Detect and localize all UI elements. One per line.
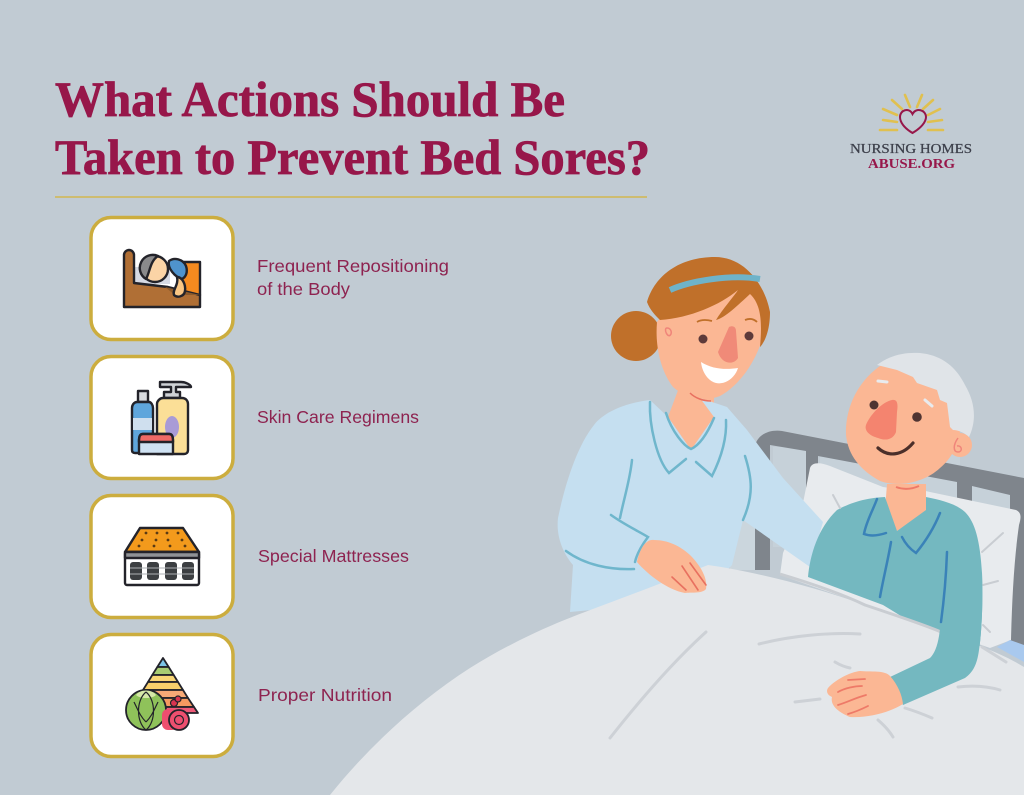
nurse chin line <box>690 393 711 401</box>
nurse eyes <box>698 332 754 344</box>
icon: spring mattress <box>125 528 199 585</box>
text: Skin Care Regimens: Skin Care Regimens <box>257 407 419 427</box>
nurse <box>558 257 823 612</box>
patient hair <box>877 353 974 437</box>
illustration: nurse and patient in bed <box>330 257 1024 795</box>
shirt seams <box>864 499 940 597</box>
nurse fingers <box>672 563 706 590</box>
patient brows <box>878 381 932 406</box>
blanket <box>330 565 1024 795</box>
logo: Nursing Homes Abuse.org <box>850 95 972 172</box>
patient neck <box>885 484 926 531</box>
panel: skin care <box>91 356 233 478</box>
icon: person in bed <box>124 250 200 307</box>
patient nose <box>866 400 897 440</box>
text: Frequent Repositioning of the Body: of the Body <box>257 279 350 299</box>
title: What Actions Should Be <box>55 71 565 127</box>
blue bed sheet <box>997 640 1024 662</box>
panel: nutrition <box>91 634 233 756</box>
text: Proper Nutrition: Proper Nutrition <box>258 685 392 705</box>
patient fingers <box>838 679 868 714</box>
bed headboard <box>730 431 1024 650</box>
panel: repositioning <box>91 218 233 340</box>
blanket folds <box>610 632 1006 738</box>
icon: food pyramid <box>126 658 198 730</box>
patient ear detail <box>954 438 961 452</box>
nurse ear <box>666 328 671 336</box>
nurse hand <box>637 540 706 593</box>
patient <box>808 353 982 650</box>
patient face <box>846 362 960 484</box>
title: Taken to Prevent Bed Sores? <box>55 129 650 185</box>
nurse eyebrows <box>697 319 757 322</box>
title <box>55 71 650 185</box>
patient shirt <box>808 497 982 650</box>
nurse smile <box>701 362 738 383</box>
patient forearm sleeve <box>890 552 982 705</box>
nurse face <box>657 280 763 399</box>
patient eyes <box>870 400 922 422</box>
text: Frequent Repositioning of the Body: Frequent Repositioning <box>257 256 449 276</box>
nurse blouse <box>558 398 823 612</box>
patient ear <box>948 433 972 457</box>
panel: mattresses <box>91 496 233 618</box>
nurse nose <box>718 326 738 363</box>
pillow <box>780 463 1021 648</box>
patient smile <box>878 443 913 454</box>
nurse headband <box>670 277 760 290</box>
text: Frequent Repositioning of the Body <box>257 256 449 299</box>
sleeve seam <box>941 552 947 622</box>
nurse neck <box>668 385 714 450</box>
patient chin line <box>896 486 919 489</box>
blanket shadow line <box>780 574 941 632</box>
logo: Nursing Homes Abuse.org: ABUSE.ORG <box>868 157 955 172</box>
patient hand <box>827 671 903 717</box>
blouse seams <box>566 402 751 569</box>
nurse hair <box>647 257 770 347</box>
icon: skin care bottles <box>132 382 191 454</box>
pillow creases <box>833 495 1003 632</box>
nurse hair bun <box>611 311 661 361</box>
text: Special Mattresses: Special Mattresses <box>258 546 409 566</box>
logo: Nursing Homes Abuse.org: NURSING HOMES <box>850 142 972 157</box>
